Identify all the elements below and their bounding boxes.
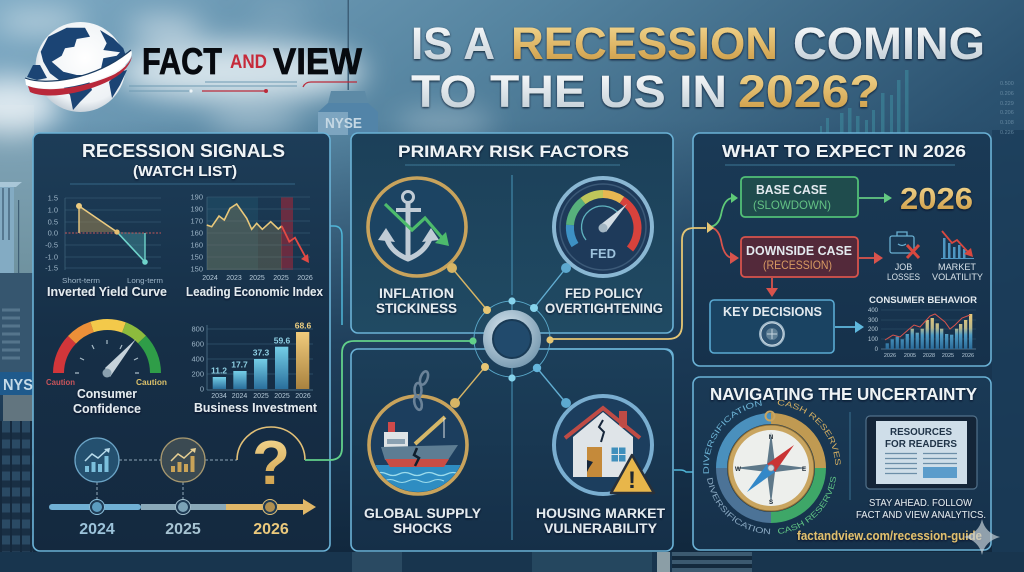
compass with strategy ring: CASH RESERVES <box>778 400 841 466</box>
heading: navigating: NAVIGATING THE UNCERTAINTY <box>710 384 977 404</box>
faded background chart upper right <box>820 70 908 133</box>
chart: inverted yield curve: Long-term <box>127 276 163 285</box>
faded background numbers: 0.206 <box>1000 91 1014 97</box>
label: fed policy overtightening: FED POLICY <box>565 286 643 301</box>
label: fed policy overtightening: OVERTIGHTENING <box>545 301 663 316</box>
label: inflation stickiness <box>376 286 457 316</box>
icon: house with warning <box>554 396 654 494</box>
chart: business investment: 2024 <box>232 393 247 400</box>
chart: leading economic index: 150 <box>190 252 203 262</box>
arrow to outcomes <box>859 252 883 264</box>
chart: inverted yield curve: 0.5 <box>48 218 58 226</box>
chart: consumer behavior: 2028 <box>923 353 935 359</box>
label: fed policy overtightening <box>545 286 663 316</box>
label: housing market vulnerability: HOUSING MARKET <box>536 506 666 521</box>
chart: leading economic index <box>186 192 324 299</box>
faded background numbers <box>1000 81 1014 136</box>
side building label: NYS <box>3 377 33 394</box>
faded background numbers: 0.229 <box>1000 101 1014 107</box>
chart: consumer behavior: 400 <box>868 308 879 314</box>
tower: NYSE <box>325 115 362 132</box>
globe <box>25 22 132 112</box>
chart: business investment: 17.7 <box>231 360 248 370</box>
chart: business investment: 2025 <box>274 393 290 400</box>
chart: inverted yield curve: -0.5 <box>45 240 58 250</box>
compass with strategy ring: DIVERSIFICATION <box>707 478 770 534</box>
gauge: consumer confidence: Caution <box>136 377 167 387</box>
2026 figure: 2026 <box>900 181 973 216</box>
chart: business investment: 37.3 <box>253 348 270 358</box>
heading: primary risk factors: PRIMARY RISK FACTORS <box>398 142 629 161</box>
chart: business investment: 0 <box>200 384 204 394</box>
chart: business investment: 400 <box>191 354 204 364</box>
chart: leading economic index: 2026 <box>297 275 313 282</box>
tablet: resources for readers: FOR READERS <box>885 438 957 450</box>
chart: business investment: 2034 <box>211 393 227 400</box>
chart: business investment: 2025 <box>253 393 269 400</box>
icon: house with warning: ! <box>628 467 636 494</box>
chart: business investment: Business Investment <box>194 400 318 415</box>
panel: what to expect in 2026 <box>693 133 991 366</box>
compass with strategy ring <box>703 400 841 534</box>
brand name: AND <box>230 52 267 73</box>
connector network and hub <box>305 222 714 460</box>
label: global supply shocks: GLOBAL SUPPLY <box>364 506 481 521</box>
chart: inverted yield curve: 1.0 <box>48 206 58 214</box>
chart: business investment: 59.6 <box>274 336 291 346</box>
chart: consumer behavior: 2026 <box>962 353 974 359</box>
chart: consumer behavior: 300 <box>868 318 879 324</box>
heading: recession signals: RECESSION SIGNALS <box>82 141 285 161</box>
chart: consumer behavior: 2026 <box>884 353 896 359</box>
icon: fed gauge <box>554 178 652 276</box>
question mark 2026 <box>237 427 305 498</box>
box: key decisions <box>710 300 834 353</box>
timeline 2024 to 2026 <box>49 427 316 538</box>
title: COMING <box>793 18 985 69</box>
box: key decisions: KEY DECISIONS <box>723 304 822 319</box>
box: base case: (SLOWDOWN) <box>753 198 831 212</box>
chart: leading economic index: 170 <box>190 216 203 226</box>
chart: business investment: 200 <box>191 370 204 378</box>
chart: leading economic index: Leading Economic Index <box>186 284 324 299</box>
bottom skyline strip <box>352 552 752 572</box>
icon: market volatility: MARKET <box>938 262 976 272</box>
chart: consumer behavior: 2005 <box>904 353 916 359</box>
label: inflation stickiness: STICKINESS <box>376 301 457 316</box>
chart: consumer behavior: 2025 <box>942 353 954 359</box>
label: housing market vulnerability: VULNERABILITY <box>544 521 657 536</box>
tower <box>318 0 378 135</box>
chart: inverted yield curve: Inverted Yield Curve <box>47 284 167 299</box>
chart: inverted yield curve <box>45 194 167 299</box>
chart: inverted yield curve: -1.0 <box>45 252 58 262</box>
heading: recession signals: (WATCH LIST) <box>133 163 237 180</box>
label: global supply shocks: SHOCKS <box>393 521 452 536</box>
timeline 2024 to 2026: 2025 <box>165 521 201 538</box>
icon: anchor <box>368 178 466 276</box>
gauge: consumer confidence: Confidence <box>73 401 141 416</box>
arrow to 2026 <box>859 193 892 203</box>
icon: job losses: JOB <box>895 262 912 272</box>
tablet: resources for readers <box>866 416 977 489</box>
chart: leading economic index: 2024 <box>202 275 218 282</box>
box: downside case <box>741 237 858 277</box>
gauge: consumer confidence <box>46 325 167 416</box>
icon: 2025 growth <box>161 438 205 482</box>
icon: market volatility <box>932 231 983 282</box>
brand name: FACT <box>142 41 222 82</box>
chart: business investment: 11.2 <box>211 366 227 376</box>
chart: inverted yield curve: -1.5 <box>45 264 58 272</box>
faded background numbers: 0.108 <box>1000 120 1014 126</box>
compass with strategy ring: W <box>735 466 742 473</box>
gauge: consumer confidence: Consumer <box>77 386 137 401</box>
timeline 2024 to 2026: 2026 <box>253 521 289 538</box>
compass with strategy ring: N <box>769 434 774 441</box>
box: downside case: DOWNSIDE CASE <box>746 243 852 258</box>
chart: business investment <box>191 320 318 415</box>
title <box>411 18 985 117</box>
call to action: STAY AHEAD. FOLLOW <box>869 497 972 509</box>
question mark 2026: ? <box>252 429 290 498</box>
timeline bar <box>49 499 316 515</box>
box: base case: BASE CASE <box>756 182 827 197</box>
chart: consumer behavior: 200 <box>868 327 879 333</box>
panel: navigating the uncertainty <box>692 376 992 551</box>
icon: market volatility: VOLATILITY <box>932 272 983 282</box>
gauge: consumer confidence: Caution <box>46 377 75 387</box>
faded background numbers: 0.226 <box>1000 130 1014 136</box>
logo: Fact and View <box>25 22 362 112</box>
arrow to consumer chart <box>835 321 864 333</box>
compass with strategy ring: S <box>769 499 774 506</box>
heading: what to expect: WHAT TO EXPECT IN 2026 <box>722 141 966 161</box>
chart: leading economic index: 150 <box>190 264 203 274</box>
sparkle watermark <box>964 519 1000 555</box>
icon: job losses <box>887 232 920 282</box>
brand name <box>142 41 362 82</box>
chart: consumer behavior: 100 <box>868 337 879 343</box>
arrow to key decisions <box>766 278 778 297</box>
chart: leading economic index: 2025 <box>249 275 265 282</box>
chart: business investment: 600 <box>191 340 204 348</box>
chart: inverted yield curve: Short-term <box>62 276 100 285</box>
chart: consumer behavior: CONSUMER BEHAVIOR <box>869 295 977 306</box>
left skyline buildings <box>0 182 33 572</box>
icon: job losses: LOSSES <box>887 272 920 282</box>
panel: primary risk factors (bottom) <box>351 349 673 551</box>
chart: business investment: 800 <box>191 324 204 334</box>
label: housing market vulnerability <box>536 506 666 536</box>
box: downside case: (RECESSION) <box>763 258 832 272</box>
icon: supply shocks ship <box>369 370 467 495</box>
timeline 2024 to 2026: 2024 <box>79 521 115 538</box>
chart: consumer behavior <box>868 295 977 359</box>
icon: federal seal <box>759 321 785 347</box>
chart: leading economic index: 2025 <box>273 275 289 282</box>
faded background numbers: 0.206 <box>1000 110 1014 116</box>
brand name: VIEW <box>273 41 362 82</box>
gold link to outcomes <box>550 228 706 339</box>
chart: inverted yield curve: 0.0 <box>48 228 58 238</box>
heading: recession signals <box>82 141 285 180</box>
title: IS A <box>411 18 495 69</box>
chart: inverted yield curve: 1.5 <box>48 194 58 202</box>
chart: leading economic index: 190 <box>190 204 203 214</box>
chart: business investment: 2026 <box>295 393 311 400</box>
chart: consumer behavior: 0 <box>875 347 879 353</box>
faded background numbers: 0.500 <box>1000 81 1014 87</box>
label: inflation stickiness: INFLATION <box>379 286 454 301</box>
chart: business investment: 68.6 <box>295 320 312 330</box>
green link to timeline <box>305 341 473 460</box>
chart: leading economic index: 160 <box>190 240 203 250</box>
chart: leading economic index: 190 <box>190 192 203 202</box>
chart: leading economic index: 2023 <box>226 275 242 282</box>
compass with strategy ring: E <box>802 466 807 473</box>
chart: leading economic index: 160 <box>190 228 203 238</box>
right skyline <box>992 130 1024 572</box>
call to action <box>856 497 986 521</box>
url: factandview.com/recession-guide <box>797 529 982 543</box>
panel: primary risk factors (top) <box>351 133 673 333</box>
title: RECESSION <box>511 18 778 69</box>
compass with strategy ring: DIVERSIFICATION <box>703 400 762 474</box>
title: 2026? <box>738 66 880 117</box>
tablet: resources for readers: RESOURCES <box>890 426 952 438</box>
call to action: FACT AND VIEW ANALYTICS. <box>856 509 986 521</box>
icon: 2024 growth <box>75 438 119 482</box>
connector lines behind panels <box>330 226 693 472</box>
title: TO THE US IN <box>411 66 727 117</box>
central hub <box>483 310 541 368</box>
branch arrows from hub <box>708 193 739 264</box>
icon: fed gauge: FED <box>590 246 616 261</box>
label: global supply shocks <box>364 506 481 536</box>
panel: recession signals <box>33 133 330 551</box>
box: base case <box>741 177 858 217</box>
compass with strategy ring: CASH RESERVES <box>778 476 836 534</box>
